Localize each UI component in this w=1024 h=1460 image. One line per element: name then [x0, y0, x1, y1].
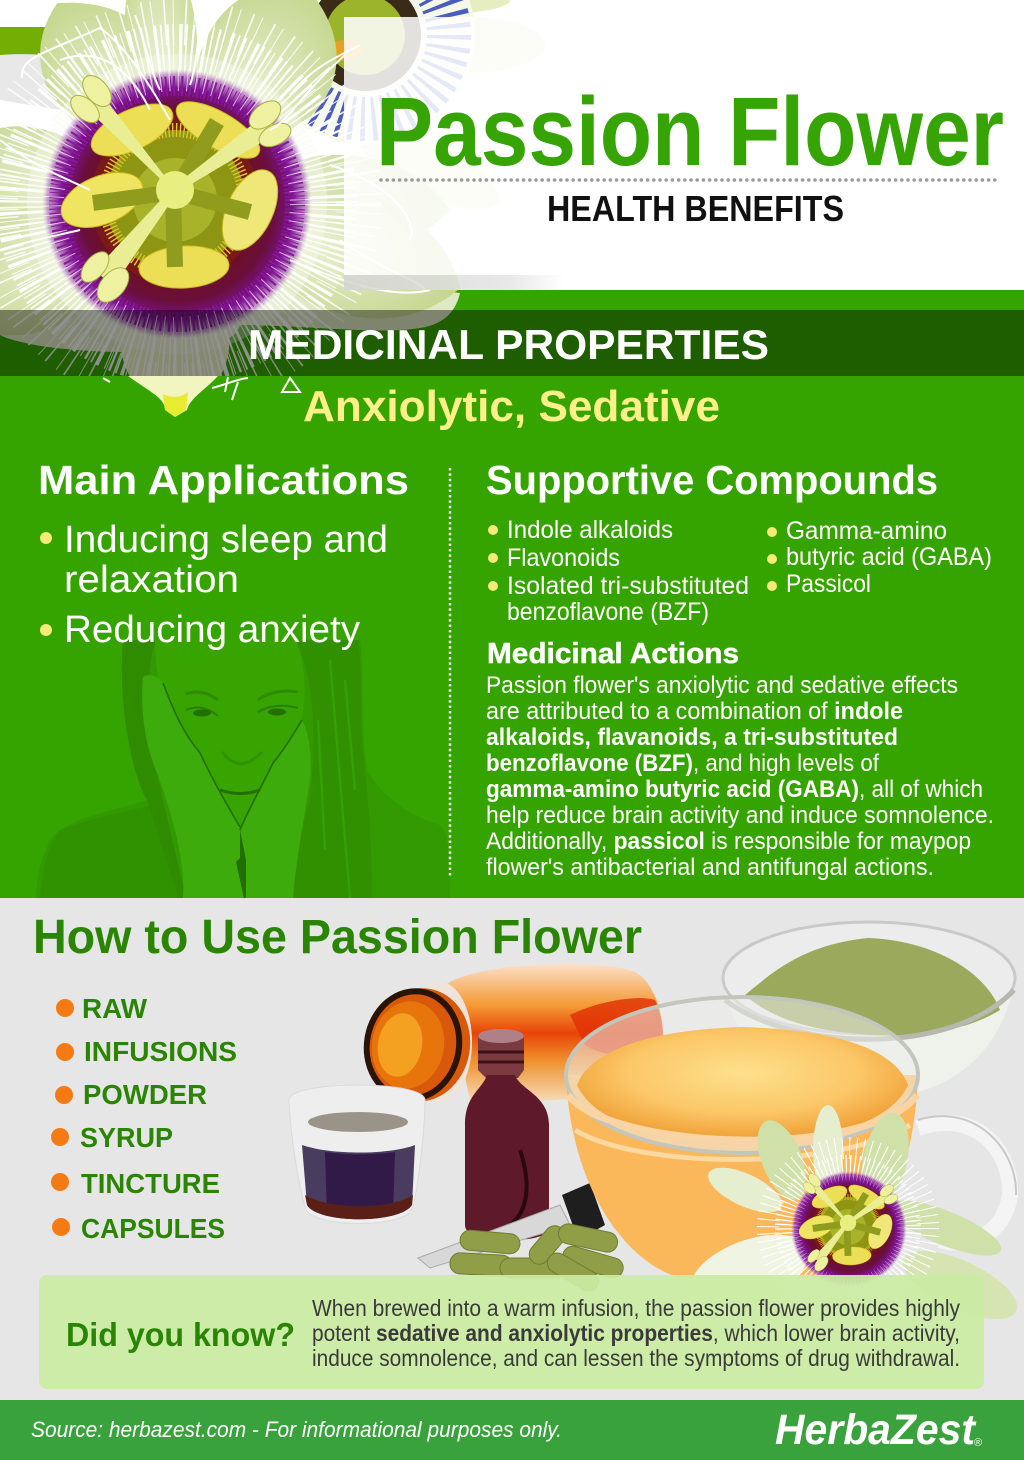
faded background flower: [255, 0, 545, 225]
heading: medicinal properties: MEDICINAL PROPERTIES: [248, 321, 769, 368]
icon: powder bowl: [723, 922, 1015, 1098]
green plate behind flower: [0, 27, 150, 110]
panel: how to use background: [0, 898, 1024, 1400]
medicinal actions paragraph: flower's antibacterial and antifungal actions.: [486, 854, 934, 881]
compounds list left: Isolated tri-substituted: [507, 572, 749, 600]
compounds list right: butyric acid (GABA): [786, 543, 992, 571]
yellow petal point: [163, 392, 188, 417]
list of forms: POWDER: [83, 1079, 207, 1110]
small passion flower: [681, 1105, 1024, 1333]
compounds list right: Gamma-amino: [786, 517, 947, 545]
medicinal properties band: [0, 310, 1024, 376]
icon: capsules: [449, 1222, 626, 1295]
list of forms: CAPSULES: [81, 1213, 225, 1244]
medicinal actions paragraph: Passion flower's anxiolytic and sedative effects: [486, 672, 958, 699]
medicinal actions paragraph: [486, 672, 994, 881]
panel: woman portrait tinted green: [36, 640, 450, 898]
icon: dropper: [418, 1183, 605, 1268]
heading: main applications: Main Applications: [38, 457, 409, 503]
icon: medicine cup: [289, 1085, 425, 1224]
callout text: potent sedative and anxiolytic properties, which lower brain activity,: [312, 1320, 960, 1346]
list of forms: RAW: [82, 993, 148, 1024]
decorative white fringe curls: [0, 10, 430, 293]
compounds list left: benzoflavone (BZF): [507, 598, 709, 626]
medicinal actions paragraph: Additionally, passicol is responsible for maypop: [486, 828, 971, 855]
list of forms: SYRUP: [80, 1122, 173, 1153]
medicinal actions paragraph: gamma-amino butyric acid (GABA), all of which: [486, 776, 983, 803]
source line: Source: herbazest.com - For informational purposes only.: [31, 1417, 562, 1442]
white veil over the background flower: [344, 17, 1024, 275]
callout text: When brewed into a warm infusion, the passion flower provides highly: [312, 1295, 960, 1321]
callout heading: Did you know?: [66, 1316, 295, 1353]
panel: main applications: [38, 457, 409, 651]
heading: supportive compounds: Supportive Compounds: [486, 457, 938, 503]
title dotted rule: [381, 178, 1000, 182]
brand logo: HerbaZest: [775, 1406, 977, 1454]
list of forms: INFUSIONS: [84, 1036, 237, 1067]
heading: medicinal actions: Medicinal Actions: [487, 638, 739, 670]
bullet: inducing sleep: [40, 519, 388, 601]
panel: did you know callout: [39, 1275, 984, 1389]
icon: orange bottle on its side: [358, 964, 663, 1110]
callout text: [312, 1295, 960, 1371]
lower petals behind big flower: [0, 280, 460, 353]
footer bar: [0, 1400, 1024, 1460]
icon: tea cup: [566, 997, 1016, 1278]
list of forms: TINCTURE: [81, 1168, 220, 1199]
compounds list left: Flavonoids: [507, 544, 620, 572]
callout background: [39, 1275, 984, 1389]
medicinal actions paragraph: benzoflavone (BZF), and high levels of: [486, 750, 879, 777]
medicinal actions paragraph: help reduce brain activity and induce somnolence.: [486, 802, 994, 829]
white header background: [0, 0, 1024, 290]
green main panel: [0, 290, 1024, 898]
brand logo: ®: [974, 1437, 982, 1449]
medicinal property values: Anxiolytic, Sedative: [303, 382, 720, 431]
bullet: inducing sleep: Inducing sleep and: [64, 519, 388, 561]
icon: tincture bottle: [465, 1029, 549, 1240]
white curls under band: [103, 377, 300, 400]
bullet: reducing anxiety: Reducing anxiety: [64, 609, 360, 651]
big passion flower: [0, 0, 479, 415]
grey strip above green panel: [344, 275, 564, 290]
compounds list right: Passicol: [786, 570, 871, 598]
vertical dotted divider: [449, 468, 451, 878]
subtitle: HEALTH BENEFITS: [547, 188, 844, 229]
compounds list left: Indole alkaloids: [507, 516, 673, 544]
medicinal actions paragraph: are attributed to a combination of indole: [486, 698, 903, 725]
medicinal actions paragraph: alkaloids, flavanoids, a tri-substituted: [486, 724, 898, 751]
lower petal tip: [128, 376, 218, 417]
bullet: inducing sleep: relaxation: [64, 559, 239, 601]
green under band hiding flower overflow: [0, 376, 344, 446]
list of forms: [51, 993, 237, 1244]
compounds list left: [488, 516, 749, 626]
panel: supportive compounds: [486, 457, 994, 881]
heading: how to use: How to Use Passion Flower: [33, 911, 642, 964]
compounds list right: [767, 517, 992, 598]
callout text: induce somnolence, and can lessen the symptoms of drug withdrawal.: [312, 1345, 960, 1371]
